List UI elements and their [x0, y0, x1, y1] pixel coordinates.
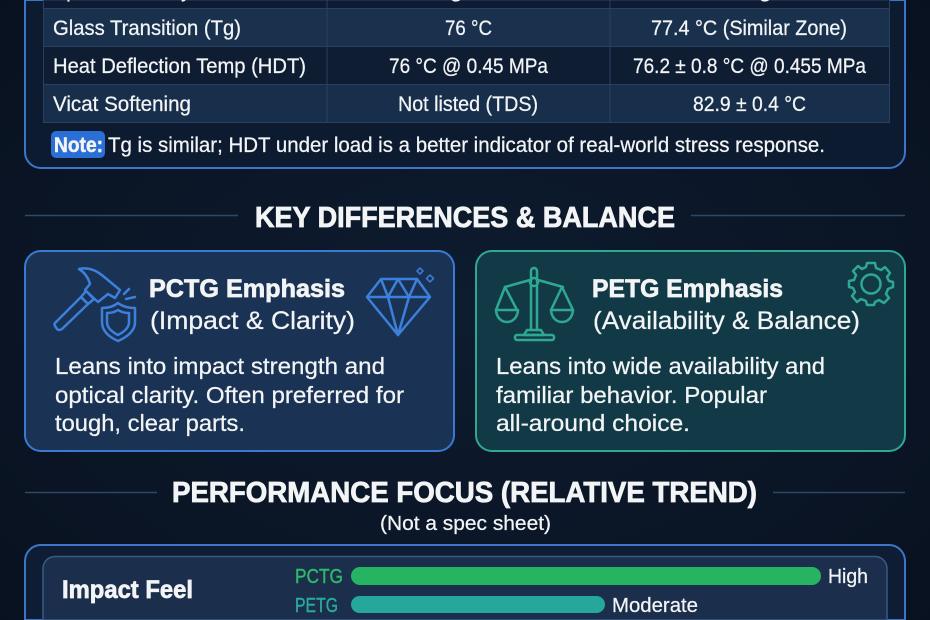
- bar: PCTG high: PCTG: [295, 566, 343, 588]
- row: vicat softening: Vicat Softening: [53, 93, 191, 116]
- table grid: [44, 0, 890, 122]
- PCTG title: PCTG Emphasis: [149, 275, 345, 303]
- row: vicat softening: [53, 93, 806, 116]
- panel: thermal properties table: [25, 0, 905, 168]
- row: vicat softening: Not listed (TDS): [398, 93, 538, 116]
- PETG body text: [496, 353, 825, 436]
- bar: PCTG high: High: [828, 566, 868, 588]
- bar: PETG moderate: [295, 595, 698, 617]
- PCTG body text: Leans into impact strength and: [55, 353, 385, 379]
- PETG body text: all-around choice.: [496, 410, 690, 436]
- bar: PETG moderate: Moderate: [612, 595, 698, 617]
- note: Tg is similar; HDT under load is a better indicator of real-world stress response.: [108, 134, 825, 157]
- row: vicat softening: 82.9 ± 0.4 °C: [693, 93, 806, 116]
- row: heat deflection temp: 76 °C @ 0.45 MPa: [389, 55, 548, 78]
- PCTG subtitle: (Impact & Clarity): [150, 307, 355, 335]
- icon: balance scales: [496, 268, 573, 340]
- row: glass transition: 76 °C: [445, 17, 492, 40]
- row: glass transition: [53, 17, 847, 40]
- note: Note:: [54, 134, 103, 157]
- heading: key differences: KEY DIFFERENCES & BALANCE: [255, 202, 675, 234]
- row: glass transition: 77.4 °C (Similar Zone): [651, 17, 847, 40]
- label: impact feel: Impact Feel: [62, 576, 193, 604]
- icon: diamond: [367, 268, 434, 335]
- icon: gear: [849, 263, 893, 305]
- bar: PETG moderate: PETG: [295, 595, 338, 617]
- PCTG body text: tough, clear parts.: [55, 410, 245, 436]
- PETG body text: Leans into wide availability and: [496, 353, 825, 379]
- subheading: (Not a spec sheet): [380, 513, 551, 535]
- row: heat deflection temp: 76.2 ± 0.8 °C @ 0.455 MPa: [633, 55, 866, 78]
- heading: performance focus: [25, 477, 905, 535]
- row: glass transition: Glass Transition (Tg): [53, 17, 241, 40]
- heading: performance focus: PERFORMANCE FOCUS (RELATIVE TREND): [172, 477, 757, 509]
- PCTG body text: optical clarity. Often preferred for: [55, 382, 404, 408]
- row: heat deflection temp: [53, 55, 866, 78]
- bar: PCTG high: [295, 566, 868, 588]
- PETG title: PETG Emphasis: [592, 275, 783, 303]
- panel: performance chart: [25, 545, 905, 620]
- PETG subtitle: (Availability & Balance): [593, 307, 860, 335]
- panel: PCTG emphasis: [25, 251, 454, 451]
- row: heat deflection temp: Heat Deflection Temp (HDT): [53, 55, 306, 78]
- panel: PETG emphasis: [476, 251, 905, 451]
- row: clipped top row: [53, 0, 815, 2]
- PETG body text: familiar behavior. Popular: [496, 382, 767, 408]
- row: impact feel: [43, 556, 887, 620]
- PCTG body text: [55, 353, 404, 436]
- icon: hammer and shield: [54, 268, 135, 341]
